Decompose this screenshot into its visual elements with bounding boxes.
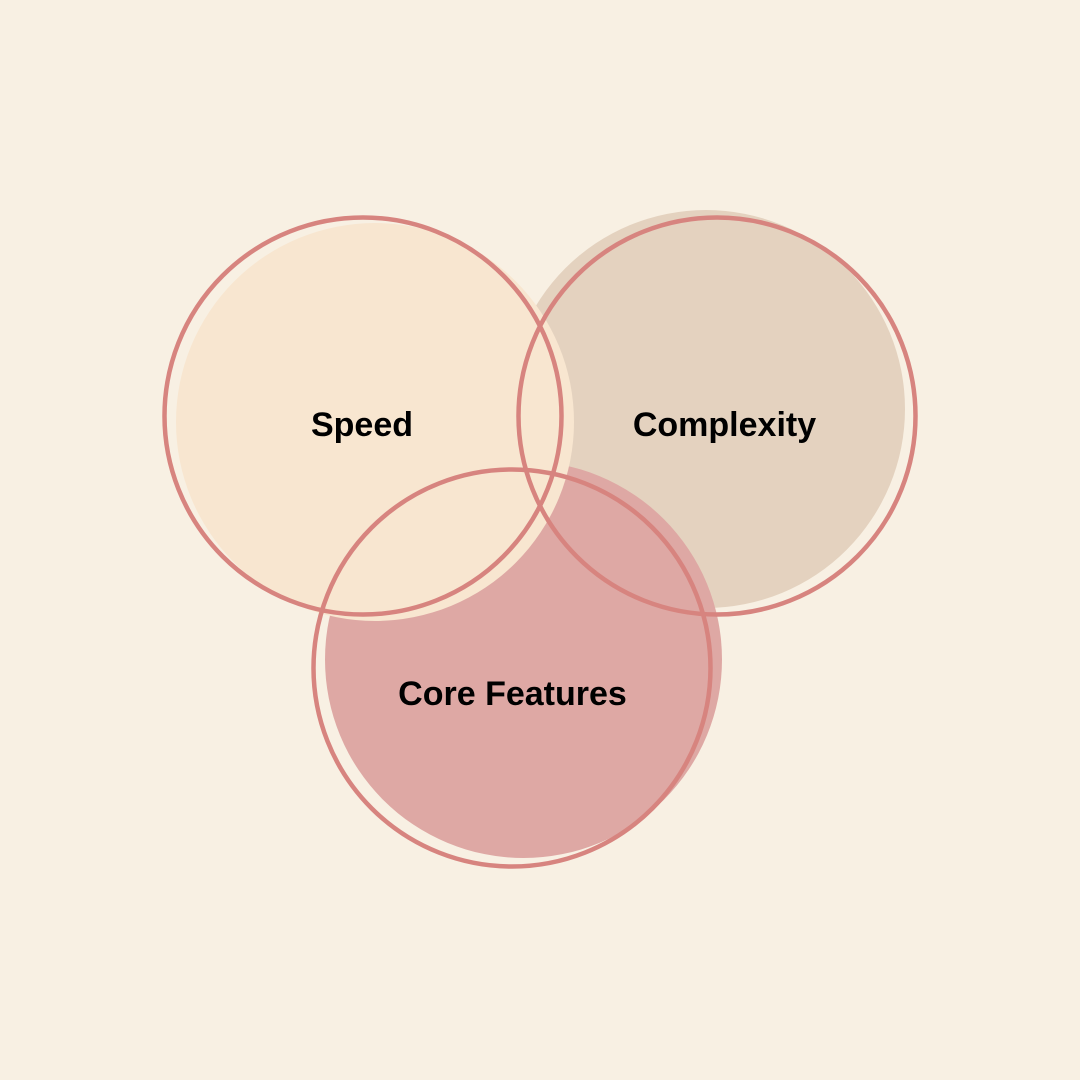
filled circle: speed	[176, 223, 574, 621]
label: complexity: Complexity	[633, 406, 816, 444]
filled circle: core features	[325, 461, 722, 858]
outline: core features	[314, 470, 710, 866]
label: speed: Speed	[311, 406, 413, 444]
outline: complexity	[518, 218, 916, 614]
filled circle: complexity	[507, 210, 905, 608]
label: core features: Core Features	[398, 675, 627, 713]
outline: speed	[164, 218, 562, 614]
